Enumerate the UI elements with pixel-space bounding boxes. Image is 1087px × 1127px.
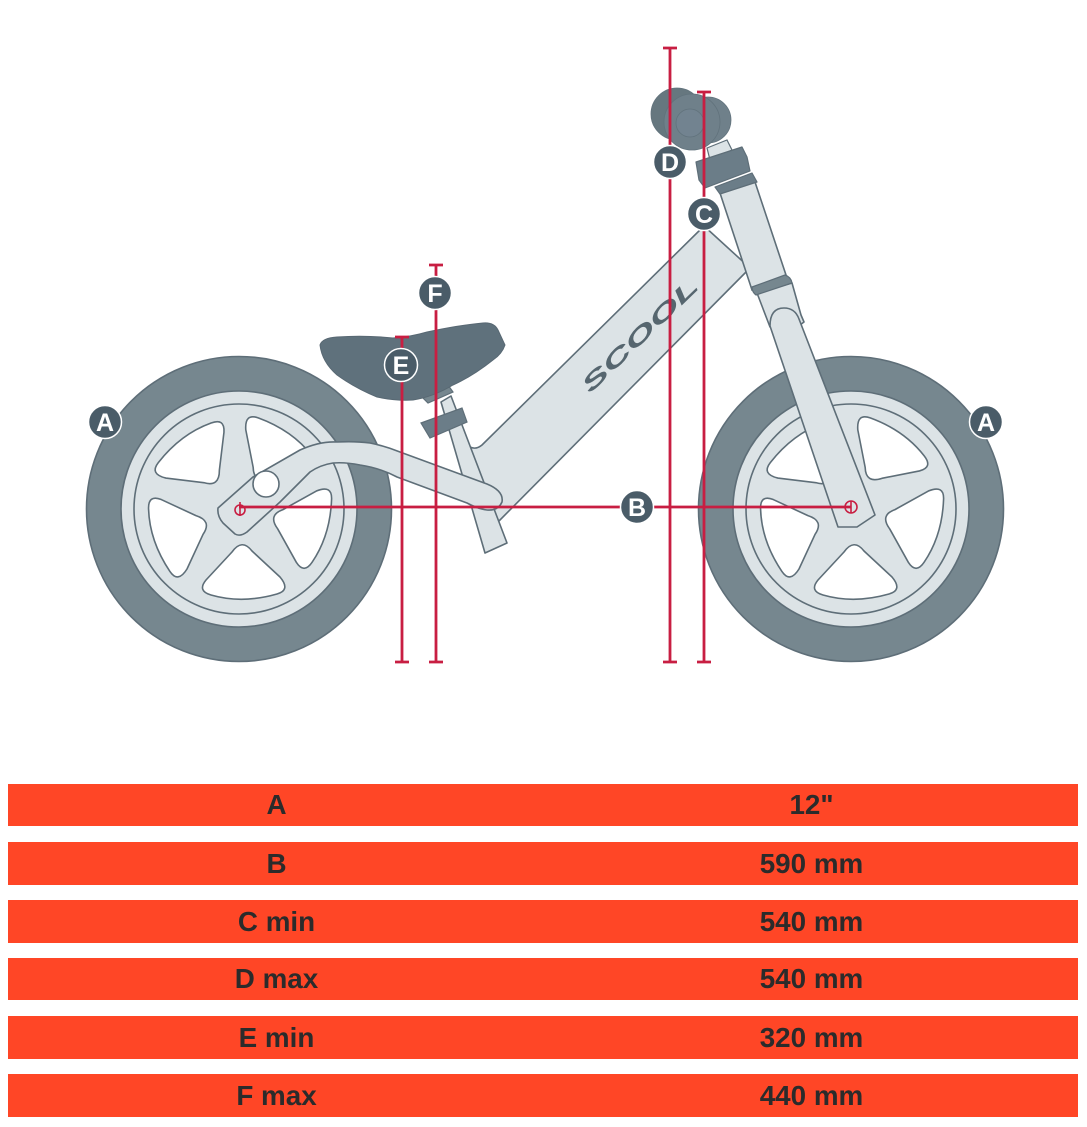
rear fork / chainstay — [218, 442, 502, 535]
table row: C min: C min — [238, 906, 315, 936]
seat clamp — [421, 408, 467, 438]
label A front: A — [977, 409, 995, 437]
label B: B — [628, 494, 646, 522]
label C — [688, 198, 720, 230]
main frame — [470, 226, 750, 523]
diagram: balance bike with dimension lines — [86, 46, 1004, 664]
table row: E min: 320 mm — [760, 1022, 863, 1052]
stem — [707, 140, 732, 160]
table row: A — [8, 784, 1078, 826]
top collar — [696, 147, 757, 194]
rear wheel — [86, 356, 392, 662]
head tube — [720, 182, 787, 290]
table row: B: 590 mm — [760, 848, 863, 878]
table row: A: A — [266, 789, 287, 820]
label E: E — [393, 352, 409, 380]
label E — [384, 348, 418, 382]
table row: C min — [8, 900, 1078, 943]
label A rear — [88, 406, 122, 438]
frame logo: SCOOL: SCOOL — [576, 273, 704, 398]
table row: C min: 540 mm — [760, 906, 863, 936]
saddle — [320, 323, 505, 400]
label A rear: A — [96, 409, 114, 437]
label B — [620, 490, 654, 524]
dimension lines — [235, 48, 857, 662]
front wheel — [698, 356, 1004, 662]
table row: B — [8, 842, 1078, 885]
table row: E min: E min — [239, 1022, 314, 1052]
head tube collar — [752, 275, 792, 295]
rear fork hole — [253, 471, 279, 497]
front fork — [770, 308, 875, 527]
table row: D max: 540 mm — [760, 963, 863, 994]
table row: F max: F max — [236, 1080, 317, 1110]
seat post top — [423, 385, 453, 403]
label F — [418, 276, 452, 310]
table row: B: B — [266, 848, 287, 878]
table row: F max — [8, 1074, 1078, 1117]
seat post and seat tube — [441, 396, 507, 553]
label F: F — [427, 280, 443, 308]
label C: C — [695, 201, 713, 229]
table row: D max — [8, 958, 1078, 1000]
label D: D — [661, 149, 679, 177]
head tube lower section — [757, 283, 804, 327]
handlebar grips — [651, 88, 731, 150]
table row: D max: D max — [235, 963, 318, 994]
label A front — [970, 406, 1002, 438]
table row: E min — [8, 1016, 1078, 1059]
label D — [654, 146, 686, 178]
table row: A: 12" — [789, 789, 834, 820]
table row: F max: 440 mm — [760, 1080, 863, 1110]
